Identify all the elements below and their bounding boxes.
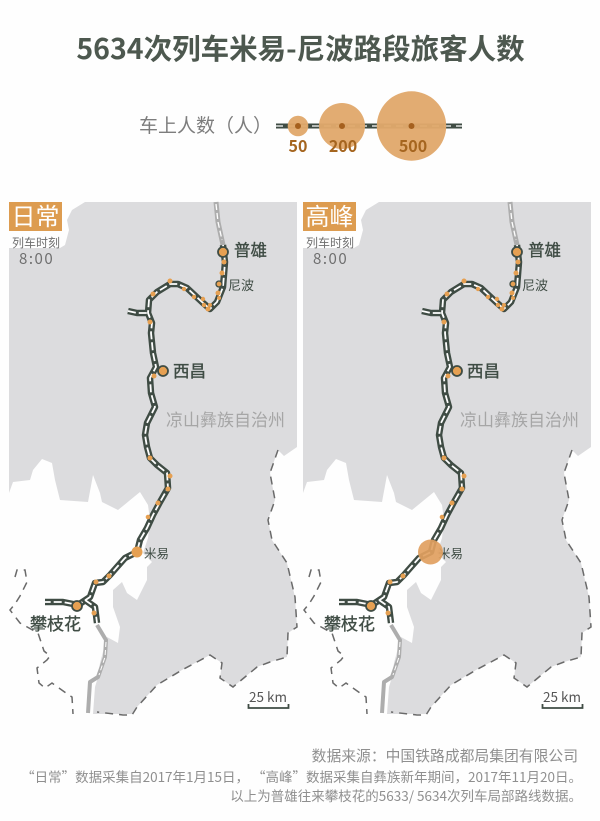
legend circle: 200: [319, 103, 365, 157]
panel: daily map: [9, 197, 297, 715]
legend circle: 50: 50: [289, 133, 307, 157]
legend circle: 500: [377, 91, 446, 161]
source notes: “日常”数据采集自2017年1月15日， “高峰”数据采集自彝族新年期间，2017年11月20日。: [21, 766, 582, 786]
station: Nibo: [216, 275, 254, 294]
map: Liangshan land: [9, 202, 297, 714]
station: Xichang: [452, 358, 500, 382]
station: Puxiong: 普雄: [528, 237, 561, 261]
legend: passengers on train: [139, 91, 462, 161]
railway route: [45, 202, 225, 713]
train time: [306, 234, 354, 269]
scale bar: 25 km: [543, 686, 581, 706]
legend track: [276, 124, 462, 128]
station: Panzhihua: 攀枝花: [324, 610, 375, 635]
station: Miyi with peak passenger bubble: [418, 540, 463, 564]
railway route: [339, 202, 519, 713]
region label: 凉山彝族自治州: [460, 406, 579, 431]
station: Miyi: 米易: [144, 543, 169, 562]
scale bar: 25 km: [249, 686, 287, 706]
station: Puxiong: [512, 237, 561, 261]
station: Miyi with peak passenger bubble: 米易: [438, 543, 463, 562]
source notes: [21, 745, 582, 805]
badge: peak: 高峰: [306, 197, 354, 232]
train time: 列车时刻: [12, 234, 60, 251]
station: Nibo: 尼波: [228, 275, 254, 294]
train time: 8:00: [19, 248, 54, 269]
station: Puxiong: 普雄: [234, 237, 267, 261]
station: Xichang: 西昌: [173, 358, 206, 382]
train time: [12, 234, 60, 269]
station: Puxiong: [218, 237, 267, 261]
legend circle: 200: 200: [329, 133, 357, 157]
station: Nibo: [510, 275, 548, 294]
legend label: 车上人数（人）: [139, 111, 272, 138]
legend circle: 50: [288, 116, 308, 157]
station: Miyi: [132, 543, 169, 562]
badge: daily: 日常: [12, 197, 60, 232]
train position dots: [386, 260, 520, 616]
station: Panzhihua: 攀枝花: [30, 610, 81, 635]
region label: 凉山彝族自治州: [166, 406, 285, 431]
boundary lines: [10, 450, 297, 715]
train time: 列车时刻: [306, 234, 354, 251]
train time: 8:00: [313, 248, 348, 269]
boundary lines: [304, 450, 591, 715]
station: Xichang: 西昌: [467, 358, 500, 382]
title: 5634次列车米易-尼波路段旅客人数: [76, 27, 525, 68]
panel: peak map: [303, 197, 591, 715]
train position dots: [92, 260, 226, 616]
station: Nibo: 尼波: [522, 275, 548, 294]
legend circle: 500: 500: [399, 133, 427, 157]
station: Xichang: [158, 358, 206, 382]
source notes: 以上为普雄往来攀枝花的5633/ 5634次列车局部路线数据。: [230, 785, 582, 805]
map: Liangshan land: [303, 202, 591, 714]
source notes: 数据来源：中国铁路成都局集团有限公司: [312, 745, 578, 766]
